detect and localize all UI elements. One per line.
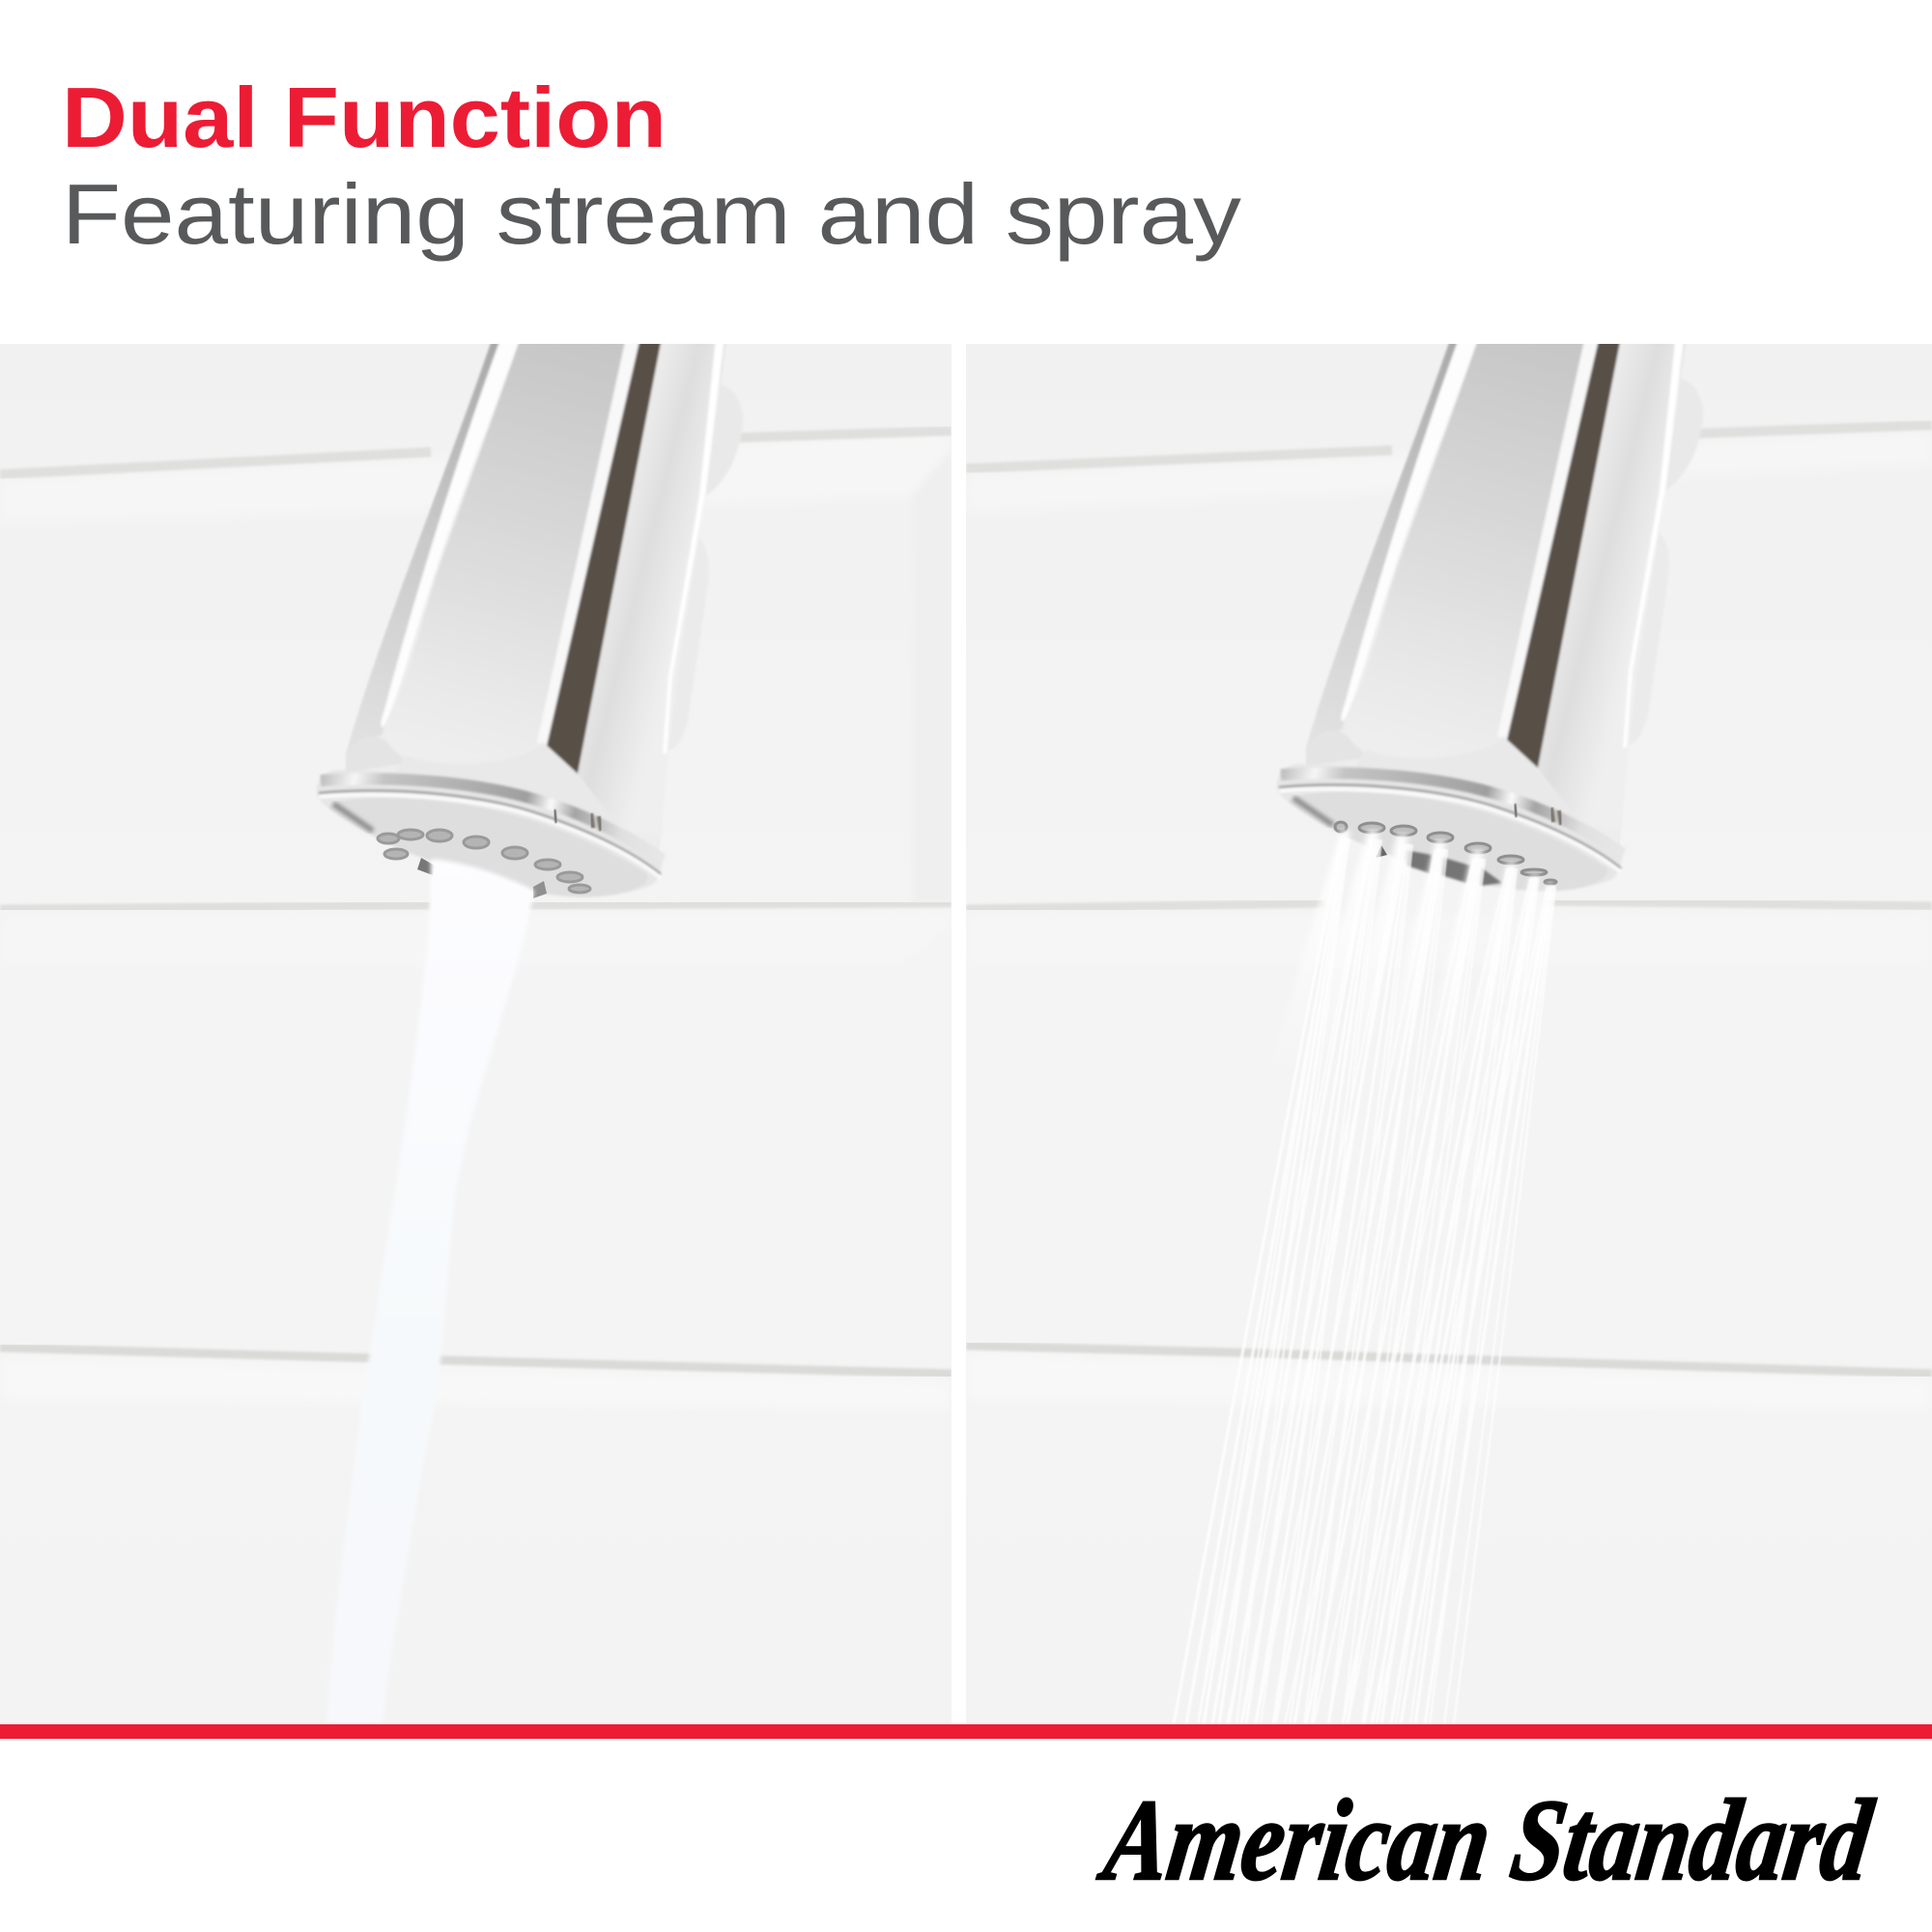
tile wall left (0, 431, 952, 1410)
faucet head left (317, 328, 743, 898)
title: Dual Function (62, 70, 667, 165)
spray streams: fine lines (1174, 840, 1555, 1724)
water stream (367, 858, 537, 1419)
nozzles left (378, 830, 590, 893)
panel: spray photo (966, 323, 1932, 1724)
nozzles right (1335, 822, 1556, 886)
divider bar (0, 1724, 1932, 1739)
faucet head right (1277, 323, 1703, 892)
tile wall right (966, 421, 1932, 1377)
subtitle: Featuring stream and spray (62, 166, 1241, 262)
panel: stream photo (0, 328, 952, 1724)
spray streams: soft upper jets (1318, 827, 1555, 910)
